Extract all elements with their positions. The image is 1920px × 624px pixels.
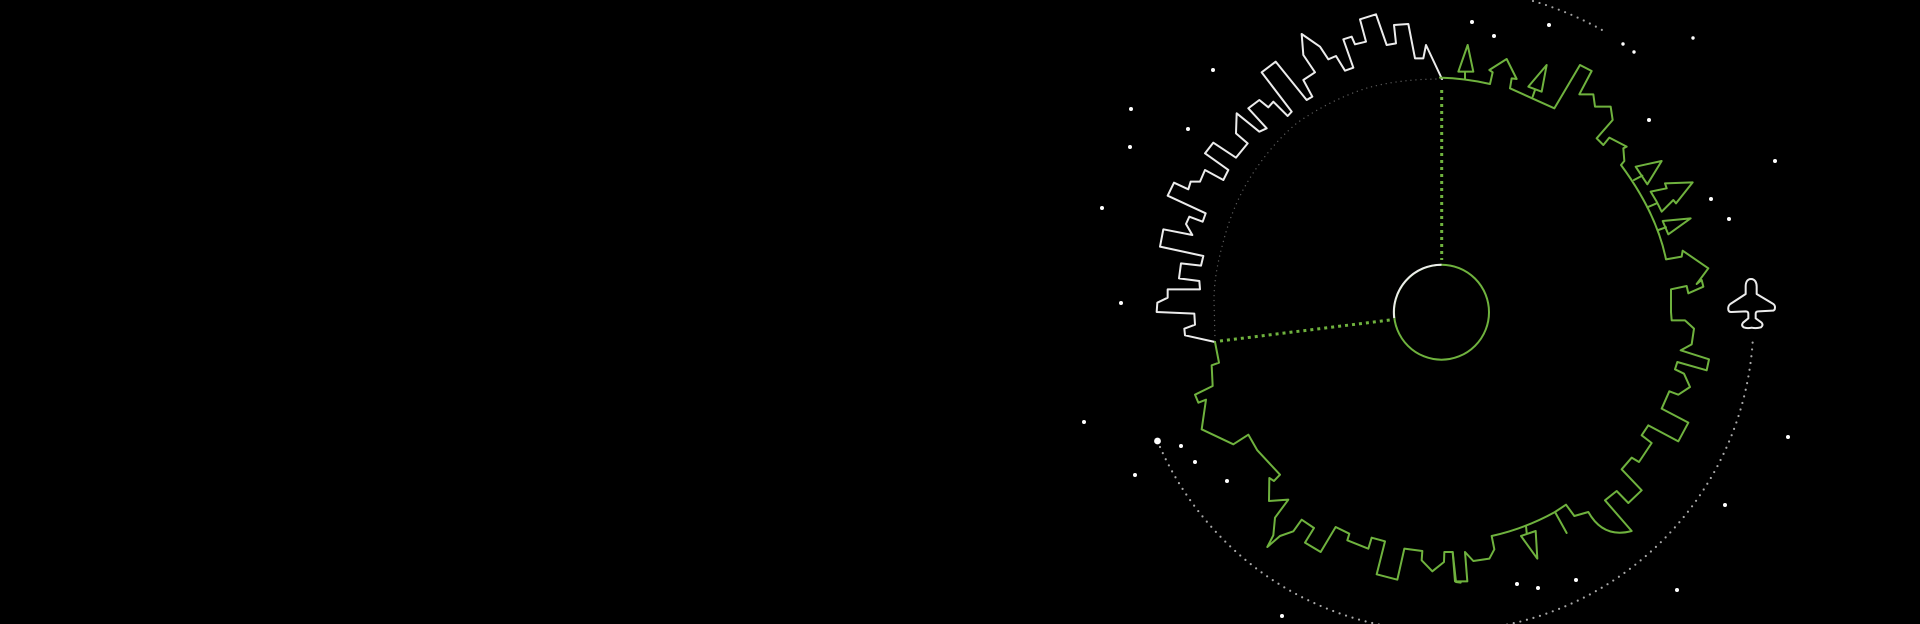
- dotted green radius toward skyline boundary: [1220, 320, 1390, 341]
- tree: right 3: [1658, 218, 1691, 234]
- green skyline, lower left: [1195, 342, 1461, 583]
- dotted inner arc: [1214, 79, 1441, 340]
- green skyline, upper right with trees: [1440, 45, 1708, 312]
- icon: airplane: [1728, 279, 1775, 328]
- green skyline, lower right: [1453, 312, 1709, 581]
- stars: [1082, 20, 1790, 618]
- tree: lower bottom: [1521, 526, 1537, 559]
- tree: right 1: [1634, 161, 1662, 184]
- dotted outer flight path, bottom: [1160, 336, 1753, 624]
- tree: right 2: [1647, 182, 1693, 212]
- tree: top 1: [1458, 45, 1473, 79]
- tree trunk: bottom right: [1555, 512, 1567, 533]
- dotted outer flight path, top: [1533, 1, 1602, 30]
- tree: top 2: [1528, 65, 1547, 97]
- dotted vertical green radius: [1440, 90, 1443, 260]
- white skyline: [1157, 14, 1442, 342]
- center circle: [1394, 265, 1489, 360]
